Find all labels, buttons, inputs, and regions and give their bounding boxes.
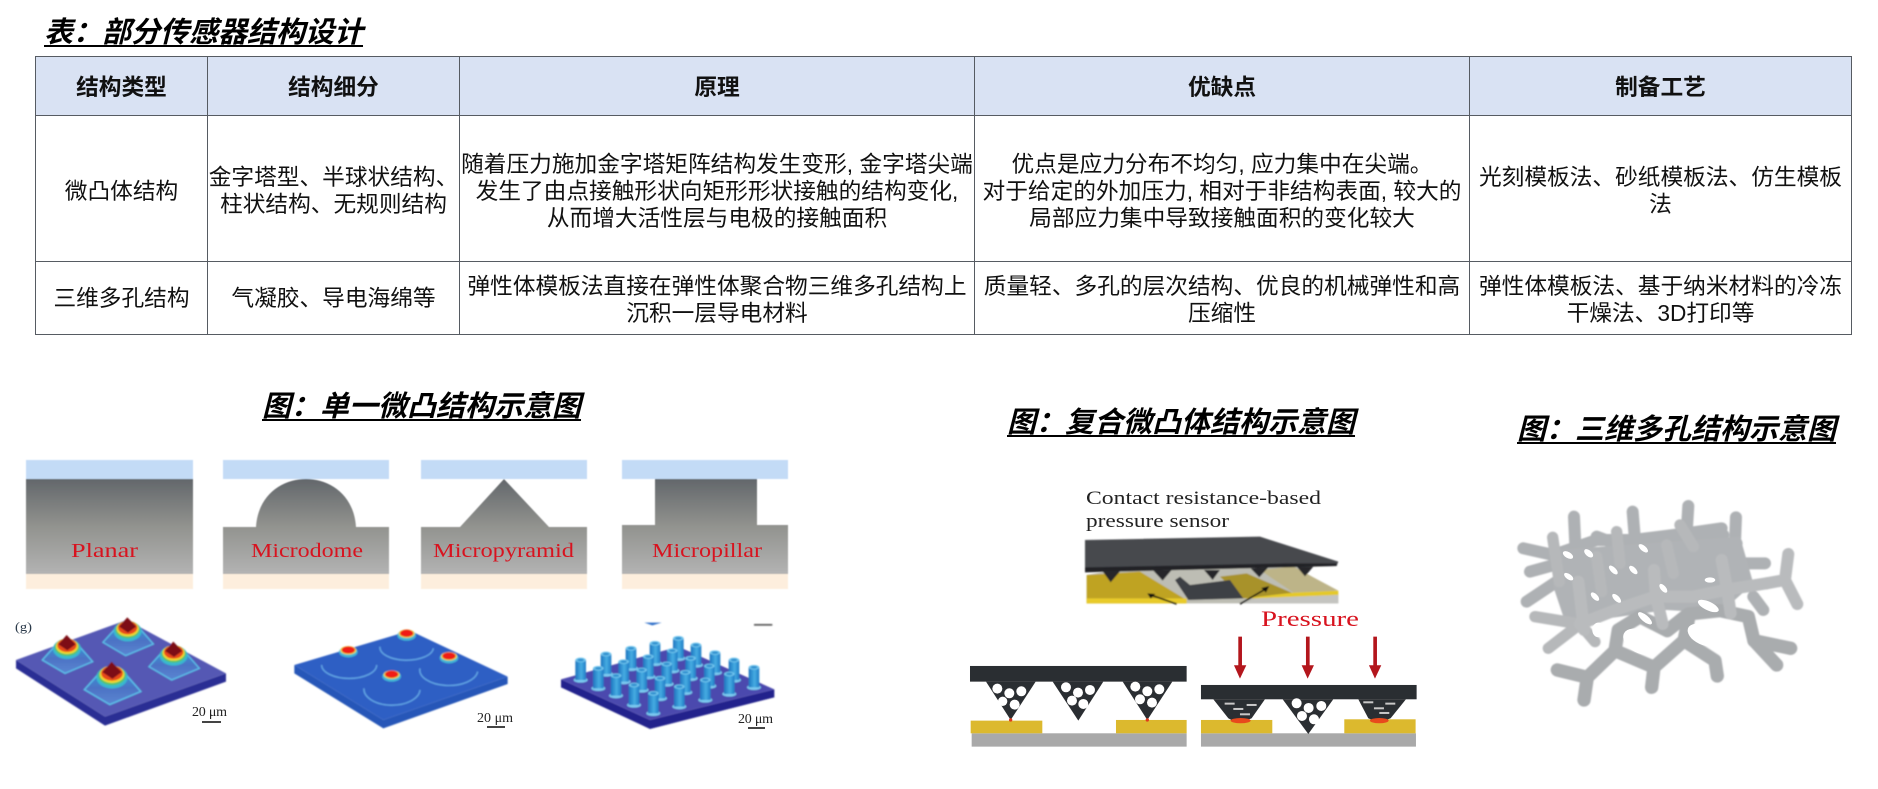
row 1: pros and cons <box>974 115 1470 262</box>
header: principle: 原理 <box>694 74 740 100</box>
row 2: fabrication: 干燥法、3D打印等 <box>1567 300 1754 326</box>
row 2: principle: 弹性体模板法直接在弹性体聚合物三维多孔结构上 <box>467 272 967 298</box>
row 2: structure type: 三维多孔结构 <box>53 284 190 310</box>
title: 3D porous figure: 图：三维多孔结构示意图 <box>1517 414 1836 446</box>
panel: planar <box>26 460 193 589</box>
label: Micropyramid: Micropyramid <box>433 540 574 562</box>
icon: pyramid 2 <box>103 617 153 656</box>
row 1: principle: 随着压力施加金字塔矩阵结构发生变形, 金字塔尖端 <box>461 150 973 176</box>
icon: pyramid 3 <box>149 642 199 680</box>
row 2: principle: 沉积一层导电材料 <box>626 300 808 326</box>
row 1: subdivision: 柱状结构、无规则结构 <box>220 191 447 217</box>
label: contact resistance sensor: pressure sensor <box>1086 511 1230 532</box>
figure: 3D porous lattice <box>1523 506 1797 700</box>
title: table heading: 表：部分传感器结构设计 <box>44 17 363 49</box>
lattice gaps <box>1562 543 1722 660</box>
device: compressed section <box>1201 685 1417 747</box>
title: composite microstructure figure: 图：复合微凸体结构示意图 <box>1007 407 1355 439</box>
row 1: fabrication <box>1469 115 1852 262</box>
row 2: structure type <box>35 261 208 335</box>
label: contact resistance sensor: Contact resistance-based <box>1086 488 1322 509</box>
device: 3D sensor <box>1085 537 1338 604</box>
header: structure type <box>35 56 208 116</box>
figure: pyramid array plate <box>16 617 226 726</box>
panel: micropillar <box>622 460 788 589</box>
row 2: subdivision: 气凝胶、导电海绵等 <box>231 284 436 310</box>
row 1: fabrication: 法 <box>1649 191 1672 217</box>
header: fabrication <box>1469 56 1852 116</box>
header: pros and cons: 优缺点 <box>1188 74 1256 100</box>
panel: micropyramid <box>421 460 587 589</box>
header: pros and cons <box>974 56 1470 116</box>
row 1: pros and cons: 对于给定的外加压力, 相对于非结构表面, 较大的 <box>983 178 1461 204</box>
row 1: structure type <box>35 115 208 262</box>
row 2: fabrication <box>1469 261 1852 335</box>
icon: pyramid 1 <box>42 635 93 673</box>
row 2: pros and cons: 质量轻、多孔的层次结构、优良的机械弹性和高 <box>984 272 1460 298</box>
row 1: fabrication: 光刻模板法、砂纸模板法、仿生模板 <box>1479 164 1842 190</box>
label: (g): (g) <box>15 619 32 634</box>
icon: dome tip 3 <box>440 652 458 663</box>
header: principle <box>459 56 975 116</box>
row 2: pros and cons <box>974 261 1470 335</box>
figure: single microstructures <box>26 460 788 589</box>
row 1: pros and cons: 优点是应力分布不均匀, 应力集中在尖端。 <box>1012 150 1432 176</box>
scale label 2: 20 μm <box>477 711 513 726</box>
row 2: principle <box>459 261 975 335</box>
icon: dome tip 4 <box>382 670 401 682</box>
dome outlines <box>322 647 478 705</box>
lattice backing mass <box>1553 537 1753 620</box>
label: Planar: Planar <box>71 540 138 562</box>
icon: pyramid 4 <box>84 662 141 705</box>
row 2: subdivision <box>207 261 460 335</box>
panel: microdome <box>223 460 389 589</box>
row 1: subdivision <box>207 115 460 262</box>
row 2: fabrication: 弹性体模板法、基于纳米材料的冷冻 <box>1479 272 1842 298</box>
row 1: principle <box>459 115 975 262</box>
row 1: principle: 发生了由点接触形状向矩形形状接触的结构变化, <box>476 178 958 204</box>
device: uncompressed section <box>970 666 1187 747</box>
row 1: structure type: 微凸体结构 <box>65 178 178 204</box>
lattice back layer <box>1523 506 1765 610</box>
figure: dome array plate <box>294 629 508 728</box>
scale label 1: 20 μm <box>192 705 227 720</box>
title: single microstructure figure: 图：单一微凸结构示意图 <box>262 391 581 423</box>
scale label 3: 20 μm <box>738 712 773 727</box>
figure: composite microstructure sections <box>970 637 1417 747</box>
lattice middle layer <box>1535 525 1693 648</box>
label: contact resistance sensor <box>1086 488 1322 532</box>
row 2: pros and cons: 压缩性 <box>1188 300 1256 326</box>
icon: dome tip 1 <box>339 646 358 657</box>
header: subdivision <box>207 56 460 116</box>
row 1: principle: 从而增大活性层与电极的接触面积 <box>547 204 887 230</box>
label: Micropillar: Micropillar <box>652 540 762 562</box>
figure: pillar array plate <box>561 623 774 729</box>
table: sensor structure design <box>35 56 1852 335</box>
label: Pressure: Pressure <box>1261 606 1359 631</box>
header: structure type: 结构类型 <box>76 74 167 100</box>
lattice front web <box>1557 611 1791 700</box>
icon: dome tip 2 <box>397 629 416 641</box>
label: Microdome: Microdome <box>251 540 363 562</box>
lattice front upper <box>1578 554 1797 630</box>
header: subdivision: 结构细分 <box>288 74 379 100</box>
arrows: pressure <box>1234 637 1381 679</box>
header: fabrication: 制备工艺 <box>1615 74 1706 100</box>
row 1: pros and cons: 局部应力集中导致接触面积的变化较大 <box>1029 204 1415 230</box>
row 1: subdivision: 金字塔型、半球状结构、 <box>209 164 458 190</box>
